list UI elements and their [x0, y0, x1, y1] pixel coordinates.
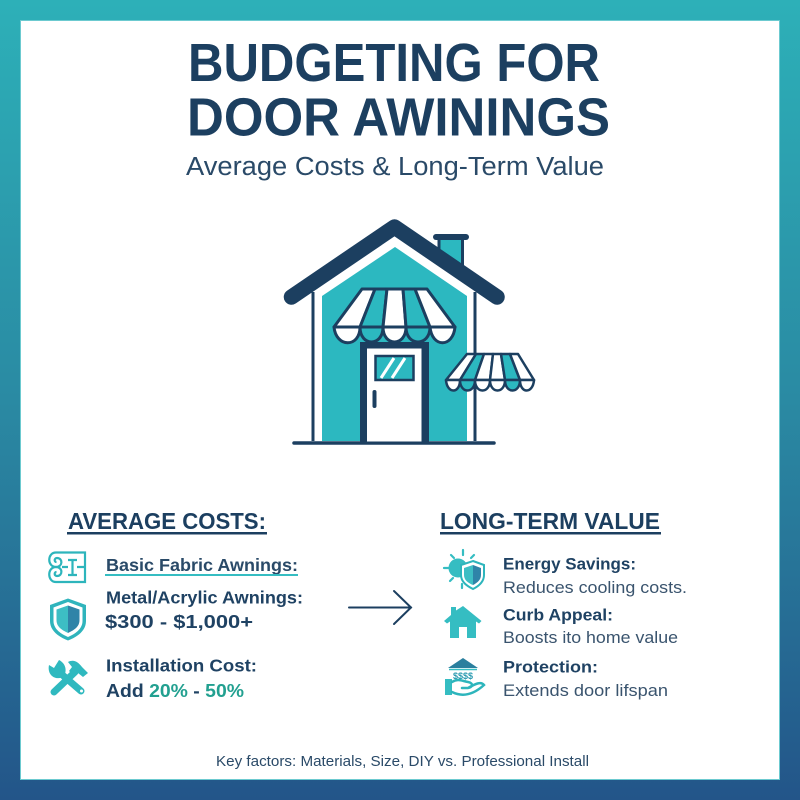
text: installation cost: Add 20% - 50%: [106, 680, 244, 701]
icon: house: [444, 606, 482, 638]
door: [360, 342, 429, 442]
house wall fill: [322, 247, 467, 441]
title: DOOR AWININGS: [187, 88, 610, 148]
text: protection: Protection:: [503, 658, 598, 676]
icon: wrench and hammer: [49, 660, 88, 692]
illustration: house with awnings: [292, 227, 534, 443]
text: curb appeal: [503, 606, 678, 647]
icon: shield: [50, 598, 86, 640]
text: basic fabric awnings: Basic Fabric Awnings:: [106, 555, 298, 575]
text: curb appeal: Boosts ito home value: [503, 629, 678, 647]
text: metal acrylic awnings: [105, 588, 303, 632]
arrow: [349, 591, 411, 624]
text: installation cost: Installation Cost:: [106, 656, 257, 676]
subtitle: Average Costs & Long-Term Value: [186, 153, 604, 181]
chimney: [436, 237, 466, 272]
icon: fabric scroll: [49, 552, 85, 582]
text: protection: Extends door lifspan: [503, 682, 668, 700]
text: installation cost: [106, 656, 257, 701]
heading: average costs: AVERAGE COSTS:: [68, 508, 266, 534]
icon: roof and hand: $$$$: [453, 671, 473, 681]
heading: long-term value: LONG-TERM VALUE: [440, 508, 660, 534]
panel: long-term value: [440, 508, 687, 700]
text: metal acrylic awnings: Metal/Acrylic Awnings:: [106, 588, 303, 608]
text: energy savings: Energy Savings:: [503, 556, 636, 574]
house wall outlines: [313, 292, 475, 441]
text: energy savings: Reduces cooling costs.: [503, 579, 687, 597]
icon: roof and hand: [445, 658, 484, 695]
footer note: Key factors: Materials, Size, DIY vs. Professional Install: [216, 754, 589, 770]
text: energy savings: [503, 556, 687, 597]
ground line: [294, 441, 494, 445]
text: protection: [503, 658, 668, 700]
text: metal acrylic awnings: $300 - $1,000+: [105, 611, 253, 632]
icon: sun and shield: [444, 550, 484, 589]
text: curb appeal: Curb Appeal:: [503, 606, 613, 624]
title: BUDGETING FOR: [188, 33, 600, 93]
small awning: [446, 354, 534, 390]
roof: [292, 227, 497, 297]
title: [187, 33, 610, 148]
panel: average costs: [49, 508, 303, 701]
large awning: [334, 289, 455, 343]
